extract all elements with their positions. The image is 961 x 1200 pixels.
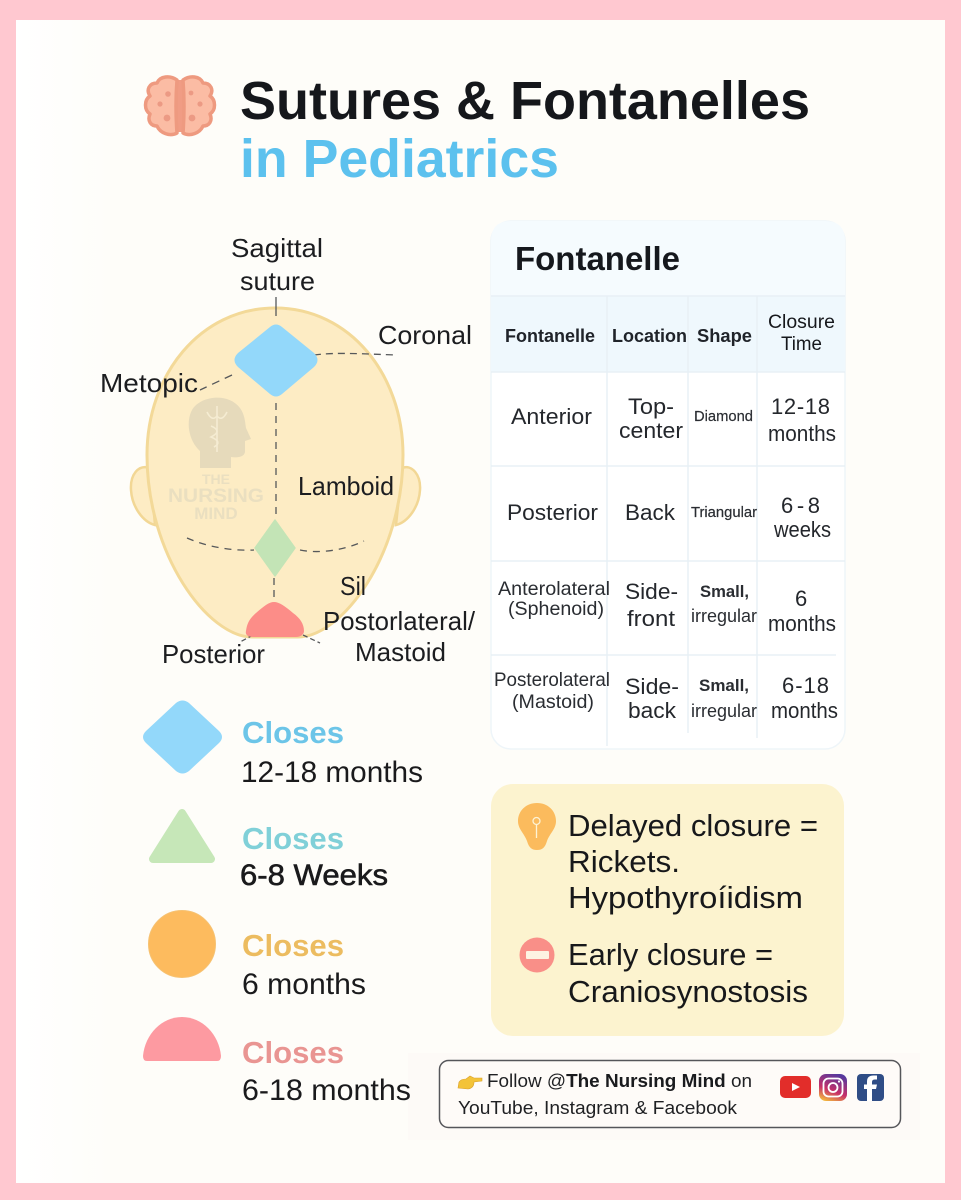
table header row: [505, 312, 835, 355]
icon: YouTube: [780, 1076, 811, 1098]
note: early closure: [568, 937, 808, 1009]
table header row: Time: [781, 334, 822, 355]
legend item: 6-18 months: 6-18 months: [242, 1074, 411, 1107]
table row: anterolateral: 6: [795, 586, 807, 611]
diagram labels: suture: [240, 266, 315, 296]
watermark: The Nursing Mind: [168, 398, 264, 523]
icon: light bulb: [518, 803, 556, 850]
legend item: 12-18 months: 12-18 months: [241, 756, 423, 789]
icon: Facebook: [857, 1074, 884, 1101]
diagram labels: Metopic: [100, 368, 198, 398]
table row: anterolateral: Anterolateral: [498, 578, 610, 600]
legend item: 6-8 weeks: 6-8 Weeks: [240, 859, 388, 892]
title: in Pediatrics: [240, 129, 559, 189]
table row: posterolateral: Small,: [699, 677, 749, 695]
legend item: 12-18 months: Closes: [242, 715, 344, 750]
table row: posterior: Posterior: [507, 500, 598, 525]
icon: pointing hand: [458, 1076, 482, 1089]
icon: minus circle: [520, 938, 554, 972]
panel: fontanelle table: [491, 221, 845, 749]
diagram labels: [100, 233, 476, 669]
table row: anterolateral: Small,: [700, 583, 749, 601]
table row: anterolateral: front: [627, 606, 675, 631]
table row: posterior: Back: [625, 500, 676, 525]
table row: posterior: weeks: [773, 517, 831, 542]
table header row: Fontanelle: [505, 326, 595, 346]
table row: posterolateral: Posterolateral: [494, 669, 610, 691]
legend item: 6 months: [148, 910, 366, 1001]
table row: anterolateral: months: [768, 611, 836, 636]
table row: anterolateral: (Sphenoid): [508, 598, 604, 620]
fontanelle: anterior diamond: [234, 324, 318, 396]
legend item: 6 months: 6 months: [242, 968, 366, 1001]
diagram labels: Lamboid: [298, 471, 394, 501]
note: early closure: Early closure =: [568, 937, 773, 972]
table row: posterolateral: Side-: [625, 674, 679, 699]
table row: anterior: months: [768, 421, 836, 446]
table row: posterolateral: irregular: [691, 701, 757, 721]
table row: anterior: center: [619, 418, 683, 443]
note: delayed closure: Delayed closure =: [568, 808, 818, 843]
table row: anterolateral: [498, 578, 836, 636]
table row: posterior: [507, 493, 831, 542]
note: delayed closure: Hypothyroíidism: [568, 880, 803, 915]
watermark: The Nursing Mind: MIND: [194, 504, 238, 523]
icon: Instagram: [819, 1074, 847, 1101]
legend item: 6-8 weeks: Closes: [242, 821, 344, 856]
follow text: YouTube, Instagram & Facebook: [458, 1097, 738, 1118]
diagram labels: Postorlateral/: [323, 606, 476, 636]
callout: social follow bar: [440, 1060, 900, 1128]
diagram labels: Mastoid: [355, 637, 446, 667]
table header row: Closure: [768, 312, 835, 333]
icon: brain: [146, 77, 214, 135]
head diagram: [100, 233, 476, 669]
table row: anterior: [511, 394, 836, 446]
table header row: Shape: [697, 326, 752, 346]
table header row: Location: [612, 326, 687, 346]
suture lines: [187, 297, 396, 643]
legend item: 6-18 months: [143, 1017, 411, 1107]
table row: anterior: Diamond: [694, 409, 753, 425]
diagram labels: Posterior: [162, 639, 265, 669]
icon: ears: [131, 467, 420, 525]
note: early closure: Craniosynostosis: [568, 974, 808, 1009]
note: delayed closure: Rickets.: [568, 844, 680, 879]
table row: anterior: 12-18: [771, 394, 830, 419]
title: Sutures & Fontanelles: [240, 71, 810, 131]
note: delayed closure: [568, 808, 818, 915]
fontanelle: red mastoid shape: [246, 602, 304, 637]
panel: clinical notes: [491, 784, 844, 1036]
legend item: 6-18 months: Closes: [242, 1035, 344, 1070]
table heading: Fontanelle: [515, 240, 680, 277]
table row: posterior: 6-8: [781, 493, 820, 518]
table row: posterolateral: back: [628, 698, 677, 723]
watermark: The Nursing Mind: NURSING: [168, 486, 264, 507]
head outline: [147, 308, 403, 637]
fontanelle: posterior diamond: [255, 520, 295, 576]
title: [240, 71, 810, 189]
legend item: 6-8 weeks: [153, 813, 388, 892]
watermark: The Nursing Mind: THE: [202, 471, 230, 487]
diagram labels: Sagittal: [231, 233, 323, 263]
table row: anterolateral: Side-: [625, 579, 678, 604]
legend item: 6 months: Closes: [242, 928, 344, 963]
table row: posterolateral: 6-18: [782, 673, 829, 698]
table row: posterolateral: (Mastoid): [512, 691, 594, 713]
diagram labels: Coronal: [378, 320, 472, 350]
table row: posterior: Triangular: [691, 505, 757, 521]
table row: posterolateral: [494, 669, 838, 723]
legend item: 12-18 months: [143, 700, 423, 789]
diagram labels: Sil: [340, 571, 366, 601]
table row: posterolateral: months: [771, 698, 838, 723]
table row: anterior: Top-: [628, 394, 674, 419]
follow text: Follow @The Nursing Mind on: [487, 1070, 752, 1091]
legend: [143, 700, 423, 1107]
table row: anterior: Anterior: [511, 404, 592, 429]
follow text: [458, 1070, 752, 1118]
table row: anterolateral: irregular: [691, 606, 757, 626]
